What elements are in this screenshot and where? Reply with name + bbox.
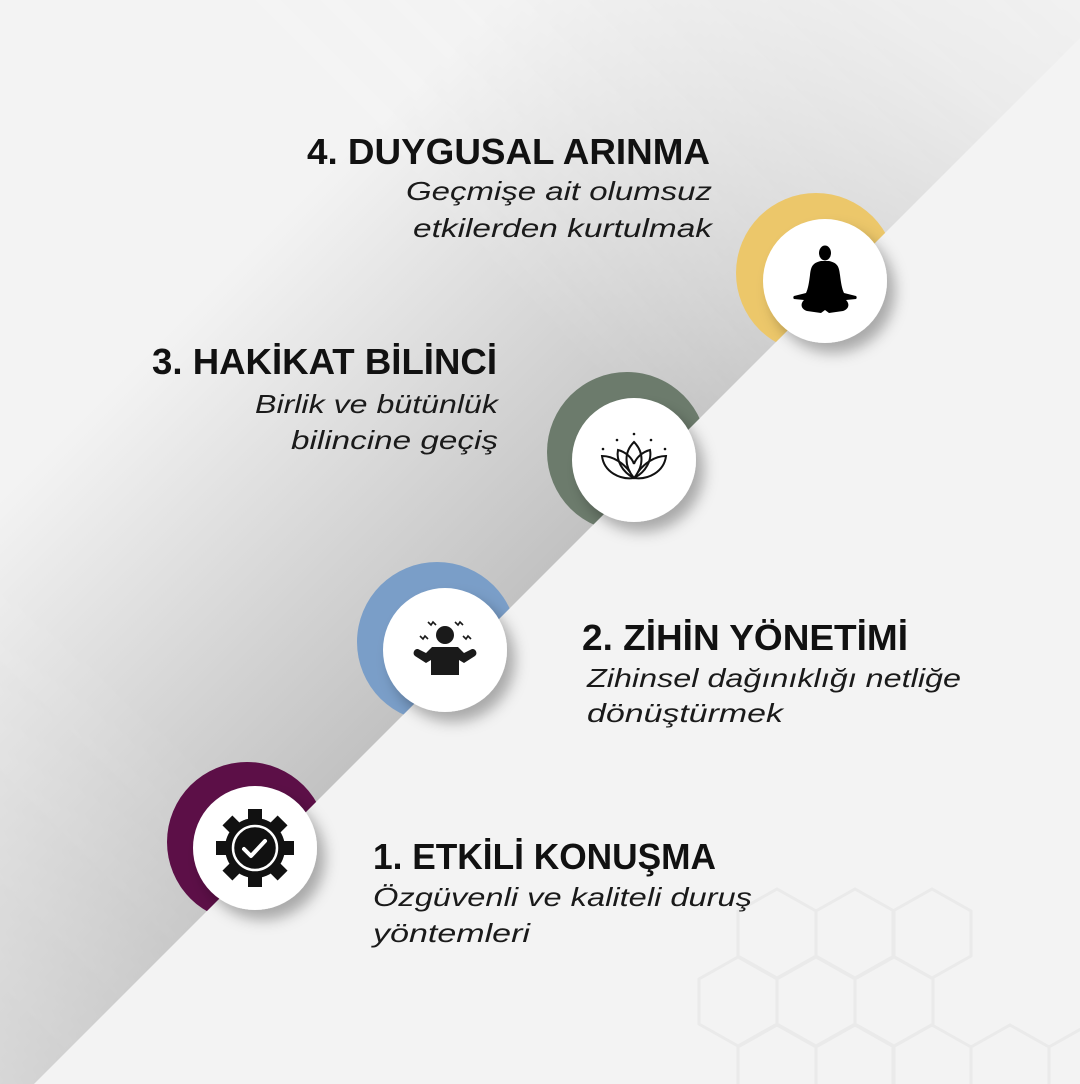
subtitle 1: [370, 882, 752, 948]
step 3: hakikat bilinci: [547, 372, 707, 532]
circle: white badge: [763, 219, 887, 343]
subtitle 2: [586, 663, 961, 728]
step 2: zihin yönetimi: [357, 562, 517, 722]
title 3: 3. HAKİKAT BİLİNCİ: [152, 341, 497, 382]
subtitle 2: dönüştürmek: [587, 698, 786, 728]
subtitle 3: bilincine geçiş: [291, 425, 498, 455]
circle: white badge: [572, 398, 696, 522]
icon: stressed person: [414, 622, 476, 675]
subtitle 3: Birlik ve bütünlük: [255, 389, 500, 419]
subtitle 3: [255, 389, 500, 455]
title 1: 1. ETKİLİ KONUŞMA: [373, 836, 716, 877]
icon: meditating figure: [793, 246, 857, 313]
subtitle 4: [406, 176, 715, 243]
subtitle 1: yöntemleri: [370, 918, 532, 948]
subtitle 4: Geçmişe ait olumsuz: [406, 176, 712, 206]
icon: gear with check: [200, 793, 310, 903]
circle: white badge: [383, 588, 507, 712]
subtitle 2: Zihinsel dağınıklığı netliğe: [586, 663, 961, 693]
ring: yellow: [736, 193, 886, 342]
title 4: 4. DUYGUSAL ARINMA: [307, 131, 710, 172]
step 4: duygusal arınma: [736, 193, 896, 353]
ring: purple: [167, 762, 316, 912]
subtitle 1: Özgüvenli ve kaliteli duruş: [373, 882, 752, 912]
title 2: 2. ZİHİN YÖNETİMİ: [582, 617, 908, 658]
circle: white badge: [193, 786, 317, 910]
step 1: etkili konuşma: [167, 762, 327, 922]
subtitle 4: etkilerden kurtulmak: [413, 213, 715, 243]
ring: blue: [357, 562, 517, 722]
ring: sage green: [547, 372, 707, 532]
icon: lotus: [602, 433, 666, 478]
